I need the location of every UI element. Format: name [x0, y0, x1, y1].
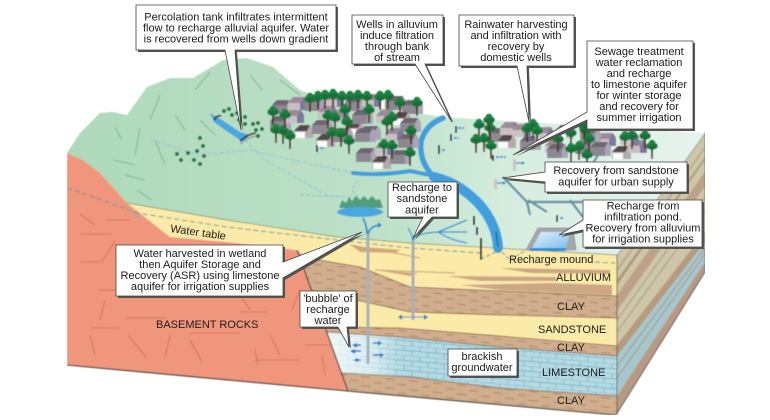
- callout: brackish groundwater: groundwater: [451, 362, 513, 374]
- label: clay 2: CLAY: [557, 342, 586, 354]
- layer outlines and alluvium lenses: [67, 203, 617, 415]
- callout: infiltration pond: Recharge from: [607, 200, 679, 212]
- callout: percolation tank: [136, 5, 338, 132]
- callout: rainwater harvesting: domestic wells: [480, 52, 552, 64]
- callout: sewage treatment: and recovery for: [599, 101, 679, 113]
- infiltration pond: [526, 228, 576, 251]
- distribution pipes: [503, 155, 598, 217]
- callout: sewage treatment: [513, 41, 695, 157]
- callout: sewage treatment: and recharge: [607, 68, 671, 80]
- village east: [565, 120, 658, 168]
- panel: basement rocks: [67, 153, 348, 391]
- callout: brackish groundwater: brackish: [462, 351, 502, 363]
- village middle: [470, 114, 574, 159]
- callout: bubble of recharge water: 'bubble' of: [303, 293, 354, 305]
- callout: rainwater harvesting: [459, 15, 576, 124]
- callout: wetland ASR: Recovery (ASR) using limestone: [121, 270, 279, 282]
- callout: recharge to sandstone: Recharge to: [392, 182, 452, 194]
- callout: bubble of recharge water: [300, 291, 358, 349]
- callout: bubble of recharge water: water: [314, 315, 342, 327]
- label: clay: CLAY: [557, 301, 586, 313]
- panel: alluvium layer: [127, 203, 617, 296]
- callout: brackish groundwater: [448, 349, 519, 378]
- callout: sewage treatment: Sewage treatment: [594, 46, 684, 58]
- village west: [267, 89, 423, 169]
- panel: right side face of block: [616, 133, 705, 415]
- callout: recovery from sandstone: Recovery from sandstone: [553, 165, 679, 177]
- label: limestone: LIMESTONE: [542, 367, 605, 379]
- recharge mound outline: [481, 250, 526, 260]
- callout: sewage treatment: summer irrigation: [597, 112, 681, 124]
- callout: recovery from sandstone: aquifer for urban supply: [558, 176, 674, 188]
- callout: wells in alluvium: induce filtration: [360, 30, 434, 42]
- small streams on land: [150, 140, 360, 200]
- panel: limestone layer: [327, 332, 617, 396]
- percolation tank: [210, 113, 256, 144]
- callout: infiltration pond: [559, 200, 704, 249]
- callout: percolation tank: flow to recharge alluvial aquifer. Water: [143, 22, 329, 34]
- callout: wetland ASR: aquifer for irrigation supplies: [131, 281, 270, 293]
- callout: infiltration pond: for irrigation supplies: [592, 234, 694, 246]
- callout: recovery from sandstone: [502, 162, 689, 194]
- callout: wetland ASR: Water harvested in wetland: [134, 248, 266, 260]
- panel: clay layer upper: [297, 250, 617, 318]
- callout: wells in alluvium: [352, 15, 454, 124]
- ASR well: [350, 218, 384, 364]
- callout: bubble of recharge water: recharge: [306, 304, 350, 316]
- callout: recharge to sandstone: sandstone: [397, 193, 447, 205]
- callout: wetland ASR: then Aquifer Storage and: [139, 259, 261, 271]
- callout: rainwater harvesting: Rainwater harvesting: [464, 19, 568, 31]
- callout: rainwater harvesting: recovery by: [488, 41, 545, 53]
- label: water table: Water table: [170, 223, 227, 243]
- sandstone recharge well and branches: [398, 216, 481, 320]
- panel: clay layer bottom: [342, 373, 617, 415]
- wetland: [337, 196, 383, 217]
- callout: recharge to sandstone: aquifer: [405, 204, 439, 216]
- water table dashed line: [67, 188, 615, 263]
- callout: infiltration pond: infiltration pond.: [604, 212, 682, 224]
- callout: sewage treatment: for winter storage: [597, 90, 681, 102]
- hill crease marks: [113, 72, 300, 220]
- callout: percolation tank: Percolation tank infiltrates intermittent: [144, 12, 328, 24]
- label: recharge mound: Recharge mound: [509, 254, 593, 266]
- label: clay 3: CLAY: [557, 395, 586, 407]
- callout: wells in alluvium: Wells in alluvium: [356, 19, 438, 31]
- stream: [353, 118, 498, 248]
- block diagram scene: [67, 58, 705, 415]
- callout: sewage treatment: water reclamation: [595, 57, 682, 69]
- recovery wells: [317, 126, 563, 222]
- label: alluvium: ALLUVIUM: [556, 272, 611, 284]
- callout: wetland ASR: [116, 232, 364, 298]
- panel: clay layer middle: [325, 327, 617, 356]
- callout: rainwater harvesting: and infiltration with: [470, 30, 562, 42]
- panel: sandstone layer: [311, 290, 617, 346]
- callout: sewage treatment: to limestone aquifer: [591, 79, 687, 91]
- panel: land surface: [67, 58, 705, 255]
- callout: wells in alluvium: of stream: [374, 52, 420, 64]
- label: sandstone: SANDSTONE: [538, 324, 606, 336]
- callout: infiltration pond: Recovery from alluvium: [586, 222, 700, 234]
- percolation tank shrubs: [175, 107, 264, 166]
- callout: wells in alluvium: through bank: [365, 41, 430, 53]
- callout: percolation tank: is recovered from wells down gradient: [144, 34, 328, 46]
- callout: recharge to sandstone: [388, 182, 459, 240]
- label: basement rocks: BASEMENT ROCKS: [156, 319, 258, 331]
